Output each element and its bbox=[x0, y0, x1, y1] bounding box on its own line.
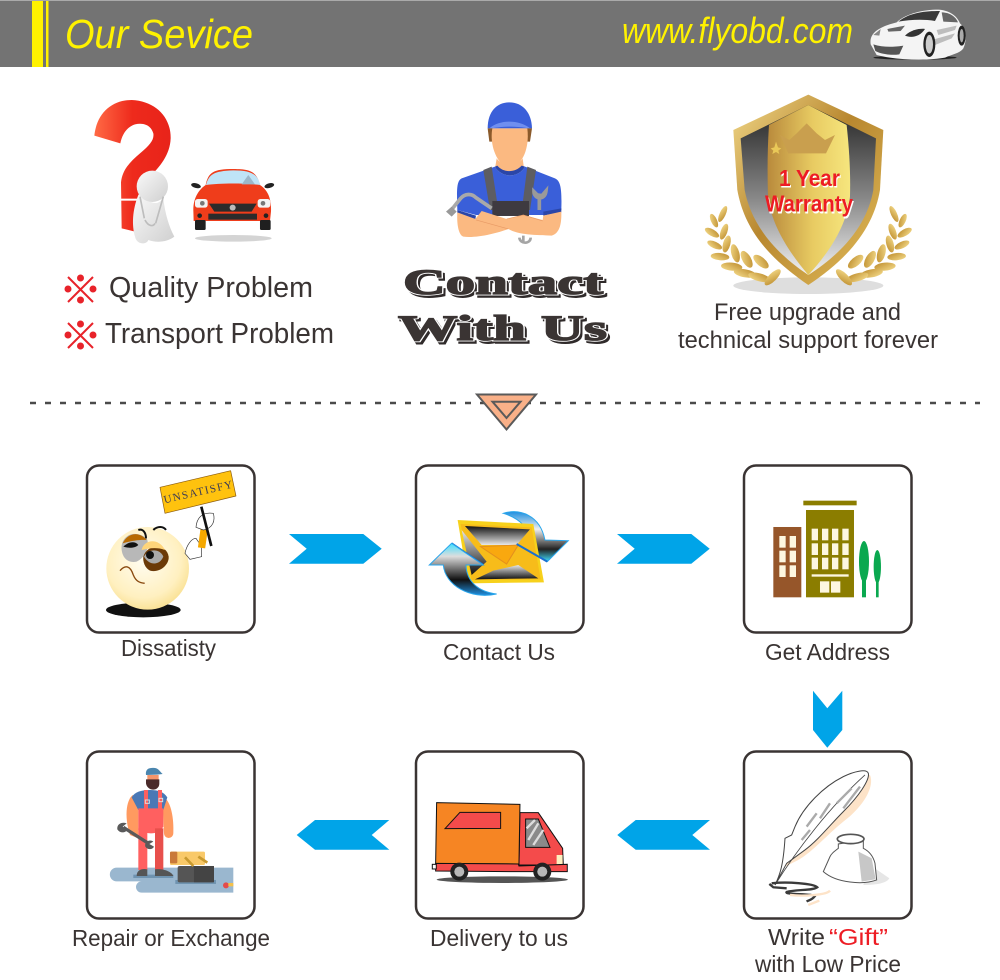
text: Contact With Us: Contact bbox=[403, 262, 603, 302]
text: Contact With Us: Contact bbox=[406, 264, 606, 304]
text: Contact With Us: Contact bbox=[403, 262, 603, 302]
text: Contact With Us bbox=[398, 262, 610, 350]
label: Write bbox=[768, 924, 825, 950]
icon: red cross mark bbox=[66, 276, 96, 302]
text: free upgrade: Free upgrade and bbox=[714, 299, 901, 326]
step: Delivery to us bbox=[416, 752, 584, 951]
panel: contact with us bbox=[398, 102, 610, 350]
step: Dissatisty bbox=[87, 466, 254, 661]
label: “Gift” bbox=[829, 924, 888, 950]
arrow: right 1 bbox=[289, 534, 382, 564]
icon: unhappy face with sign: UNSATISFY bbox=[163, 479, 234, 506]
step: Repair or Exchange bbox=[72, 752, 270, 951]
text: Contact With Us: With Us bbox=[398, 308, 607, 348]
icon: red question mark with thinking figure bbox=[94, 100, 275, 243]
icon: unhappy face with sign bbox=[106, 471, 236, 617]
label: Dissatisty bbox=[121, 635, 216, 661]
text: Contact With Us: With Us bbox=[400, 310, 610, 350]
label bbox=[754, 924, 901, 977]
text: Contact With Us: With Us bbox=[398, 308, 607, 348]
label: Contact Us bbox=[443, 639, 555, 665]
arrow: left 1 bbox=[297, 820, 389, 850]
arrow: left 2 bbox=[617, 820, 710, 850]
icon: gold warranty shield with laurels: Warranty bbox=[766, 192, 854, 218]
step: Write Gift bbox=[744, 752, 912, 977]
icon: mechanic with crossed arms bbox=[446, 102, 561, 243]
label: Get Address bbox=[765, 639, 890, 665]
icon: gold warranty shield with laurels: 1 Year bbox=[780, 167, 841, 193]
icon: repairman with toolbox bbox=[110, 768, 233, 893]
text: free upgrade: technical support forever bbox=[678, 327, 938, 354]
arrow: right 2 bbox=[617, 534, 710, 564]
heading: Our Sevice: Our Sevice bbox=[65, 11, 253, 57]
panel: warranty bbox=[678, 95, 938, 354]
website address: www.flyobd.com bbox=[622, 10, 853, 51]
icon: red cross mark bbox=[66, 322, 96, 348]
step: Get Address bbox=[744, 466, 912, 665]
icon: buildings and trees bbox=[773, 501, 881, 597]
label: with Low Price bbox=[754, 951, 901, 977]
arrow: down bbox=[813, 691, 842, 748]
icon: quill and ink bottle bbox=[769, 771, 889, 905]
dashed divider with triangle marker bbox=[30, 394, 980, 430]
transport problem line: Transport Problem bbox=[105, 318, 334, 350]
label: Delivery to us bbox=[430, 925, 568, 951]
icon: red car bbox=[191, 169, 275, 230]
icon: delivery truck bbox=[432, 803, 568, 883]
icon: gold warranty shield with laurels: 1 Year bbox=[779, 165, 840, 191]
quality problem line: Quality Problem bbox=[109, 272, 313, 304]
step: Contact Us bbox=[416, 466, 584, 665]
label: Repair or Exchange bbox=[72, 925, 270, 951]
icon: white sports car bbox=[870, 10, 966, 60]
header bar bbox=[0, 0, 1000, 67]
icon: gold warranty shield with laurels bbox=[703, 95, 913, 294]
text: free upgrade bbox=[678, 299, 938, 354]
icon: envelope with arrows bbox=[429, 512, 568, 595]
icon: gold warranty shield with laurels: Warranty bbox=[765, 191, 853, 217]
panel: problems bbox=[66, 100, 334, 350]
